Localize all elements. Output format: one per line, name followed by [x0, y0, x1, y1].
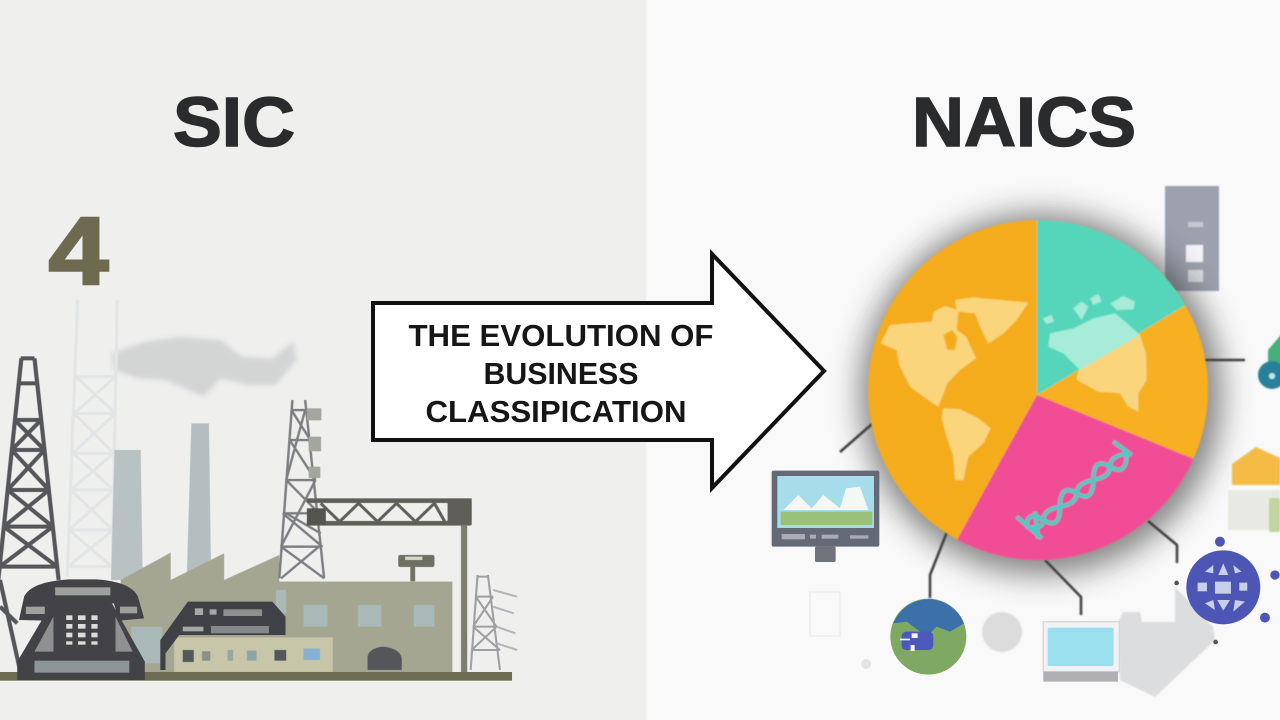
document green tab [1269, 498, 1280, 532]
oil derrick left [0, 358, 59, 673]
icon: laptop [1043, 622, 1119, 682]
satellite dots [1215, 537, 1280, 623]
low building windows [183, 649, 320, 662]
telecom tower [279, 400, 324, 578]
handset [19, 579, 144, 621]
heading: NAICS: NAICS [912, 83, 1136, 161]
telephone large [17, 579, 145, 680]
pie shadow [860, 213, 1222, 575]
globe center glyph [902, 632, 933, 650]
low beige building [174, 637, 333, 672]
pale gray box shape [1118, 587, 1215, 697]
line two: BUSINESS [484, 356, 638, 391]
rooftop sign [398, 555, 434, 581]
teal slice [1036, 219, 1186, 396]
connector lines [840, 360, 1245, 615]
helix strand two [1027, 453, 1127, 527]
pink slice [956, 394, 1194, 561]
factory building [121, 553, 452, 673]
phone body [17, 603, 145, 680]
pie slices [867, 219, 1209, 561]
icon: pale gray circle [982, 612, 1022, 652]
heading: SIC: SIC [173, 83, 295, 161]
telephone small [160, 602, 285, 670]
monitor landscape hills [783, 487, 868, 510]
monitor controls [782, 534, 868, 539]
gantry crane [307, 498, 472, 673]
small car [368, 647, 402, 670]
keypad [66, 615, 98, 645]
icon: gray server panel [1165, 186, 1219, 291]
icon: network globe [1174, 537, 1280, 644]
laptop base [1043, 672, 1118, 682]
line one: THE EVOLUTION OF [408, 318, 714, 353]
monitor screen sky [777, 476, 874, 528]
helix end crosses [1017, 442, 1132, 538]
badge teal circle [1258, 361, 1280, 389]
tower antenna panels [307, 408, 321, 478]
factory windows [131, 590, 434, 663]
illustration: industrial scene [0, 300, 517, 681]
panel: NAICS background [646, 0, 1280, 720]
handset highlights [26, 587, 137, 614]
badge center dot [1269, 373, 1275, 379]
body side panels [34, 617, 133, 652]
icon: edge document [1228, 447, 1280, 532]
server panel glyphs [1186, 222, 1203, 282]
smokestack left [111, 450, 143, 580]
laptop screen [1048, 628, 1114, 666]
pale empty frame [810, 592, 840, 636]
document lower sheet [1228, 490, 1280, 530]
pie chart [867, 219, 1209, 561]
icon: monitor [772, 471, 879, 562]
number: 4 digit code: 4 [48, 198, 108, 305]
smoke cloud [112, 337, 297, 397]
pale lattice tower [67, 300, 117, 577]
arrow title text [408, 318, 714, 429]
monitor grass [781, 512, 872, 525]
monitor stand [815, 547, 836, 562]
small dark dots [1174, 581, 1218, 644]
orange main slice [863, 215, 1213, 565]
icon: edge teal badge [1258, 330, 1280, 389]
icon: DNA helix [1017, 442, 1132, 538]
arrow shape [373, 254, 824, 488]
helix strand one [1027, 453, 1127, 528]
map: Americas [881, 297, 1028, 480]
maps on pie [881, 294, 1147, 480]
small phone body [160, 602, 285, 670]
line three: CLASSIPICATION [426, 394, 686, 429]
map: Africa on orange [1077, 335, 1147, 412]
arrow with title [373, 254, 824, 488]
decorative pale dot [861, 659, 871, 669]
base strip [34, 661, 129, 673]
network globe grid glyphs [1198, 563, 1247, 612]
small distant tower [471, 575, 517, 670]
orange right slice [1044, 305, 1208, 406]
great lakes cutout [943, 330, 957, 350]
smokestack right [187, 423, 211, 573]
globe sky [893, 599, 964, 637]
map: Europe on teal [1043, 294, 1140, 370]
icon: nature globe [890, 599, 966, 675]
globe center highlights [900, 633, 918, 651]
ground line [0, 672, 512, 681]
small phone details [183, 608, 269, 633]
panel: SIC background [0, 0, 646, 720]
